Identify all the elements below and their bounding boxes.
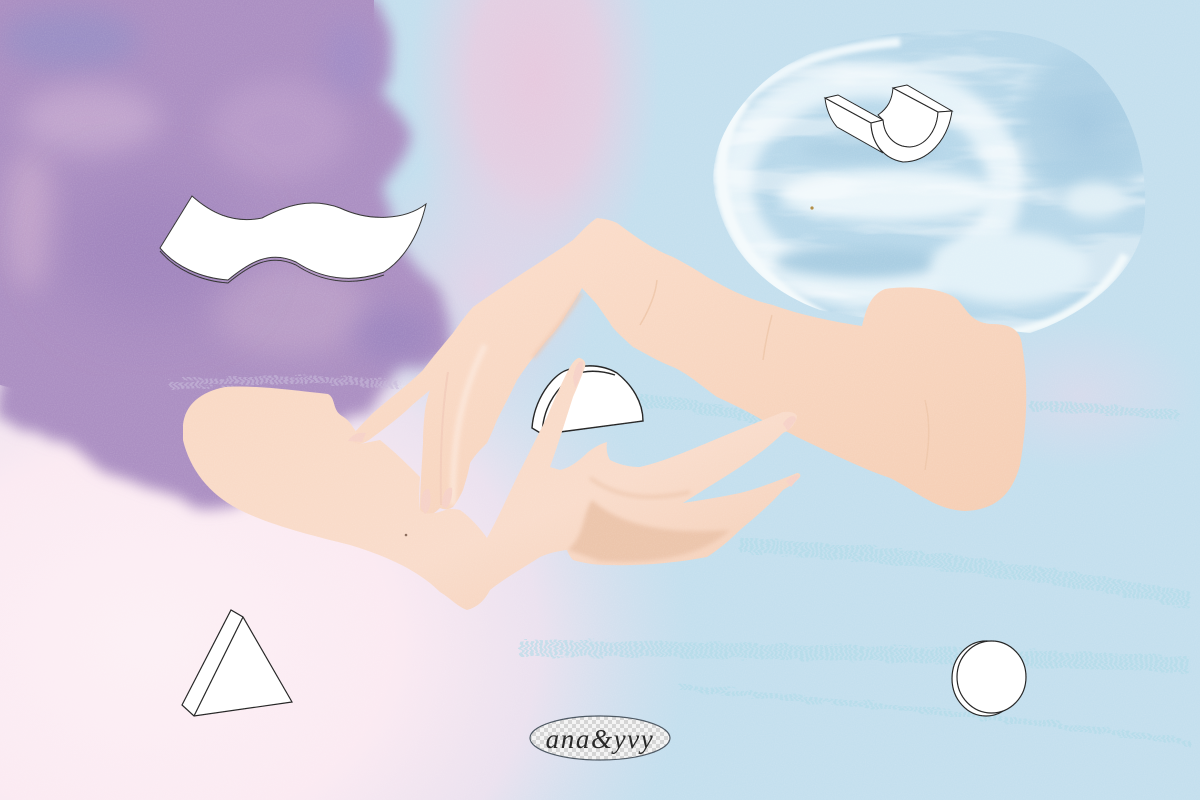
- purple cloud: [0, 0, 453, 512]
- shape: half pipe: [825, 85, 952, 162]
- shape: wave ribbon: [160, 196, 426, 283]
- shape: half disc: [532, 366, 643, 434]
- moon: [710, 25, 1160, 335]
- fingernails: [348, 361, 799, 514]
- water ripples: [170, 380, 1190, 742]
- logo badge: ana&yvy: [546, 724, 654, 754]
- lower arm and hand: [183, 358, 800, 610]
- shape: triangular prism: [182, 610, 292, 716]
- upper arm and hand: [346, 218, 1026, 515]
- logo badge: [530, 716, 670, 760]
- shape: disc: [952, 641, 1026, 716]
